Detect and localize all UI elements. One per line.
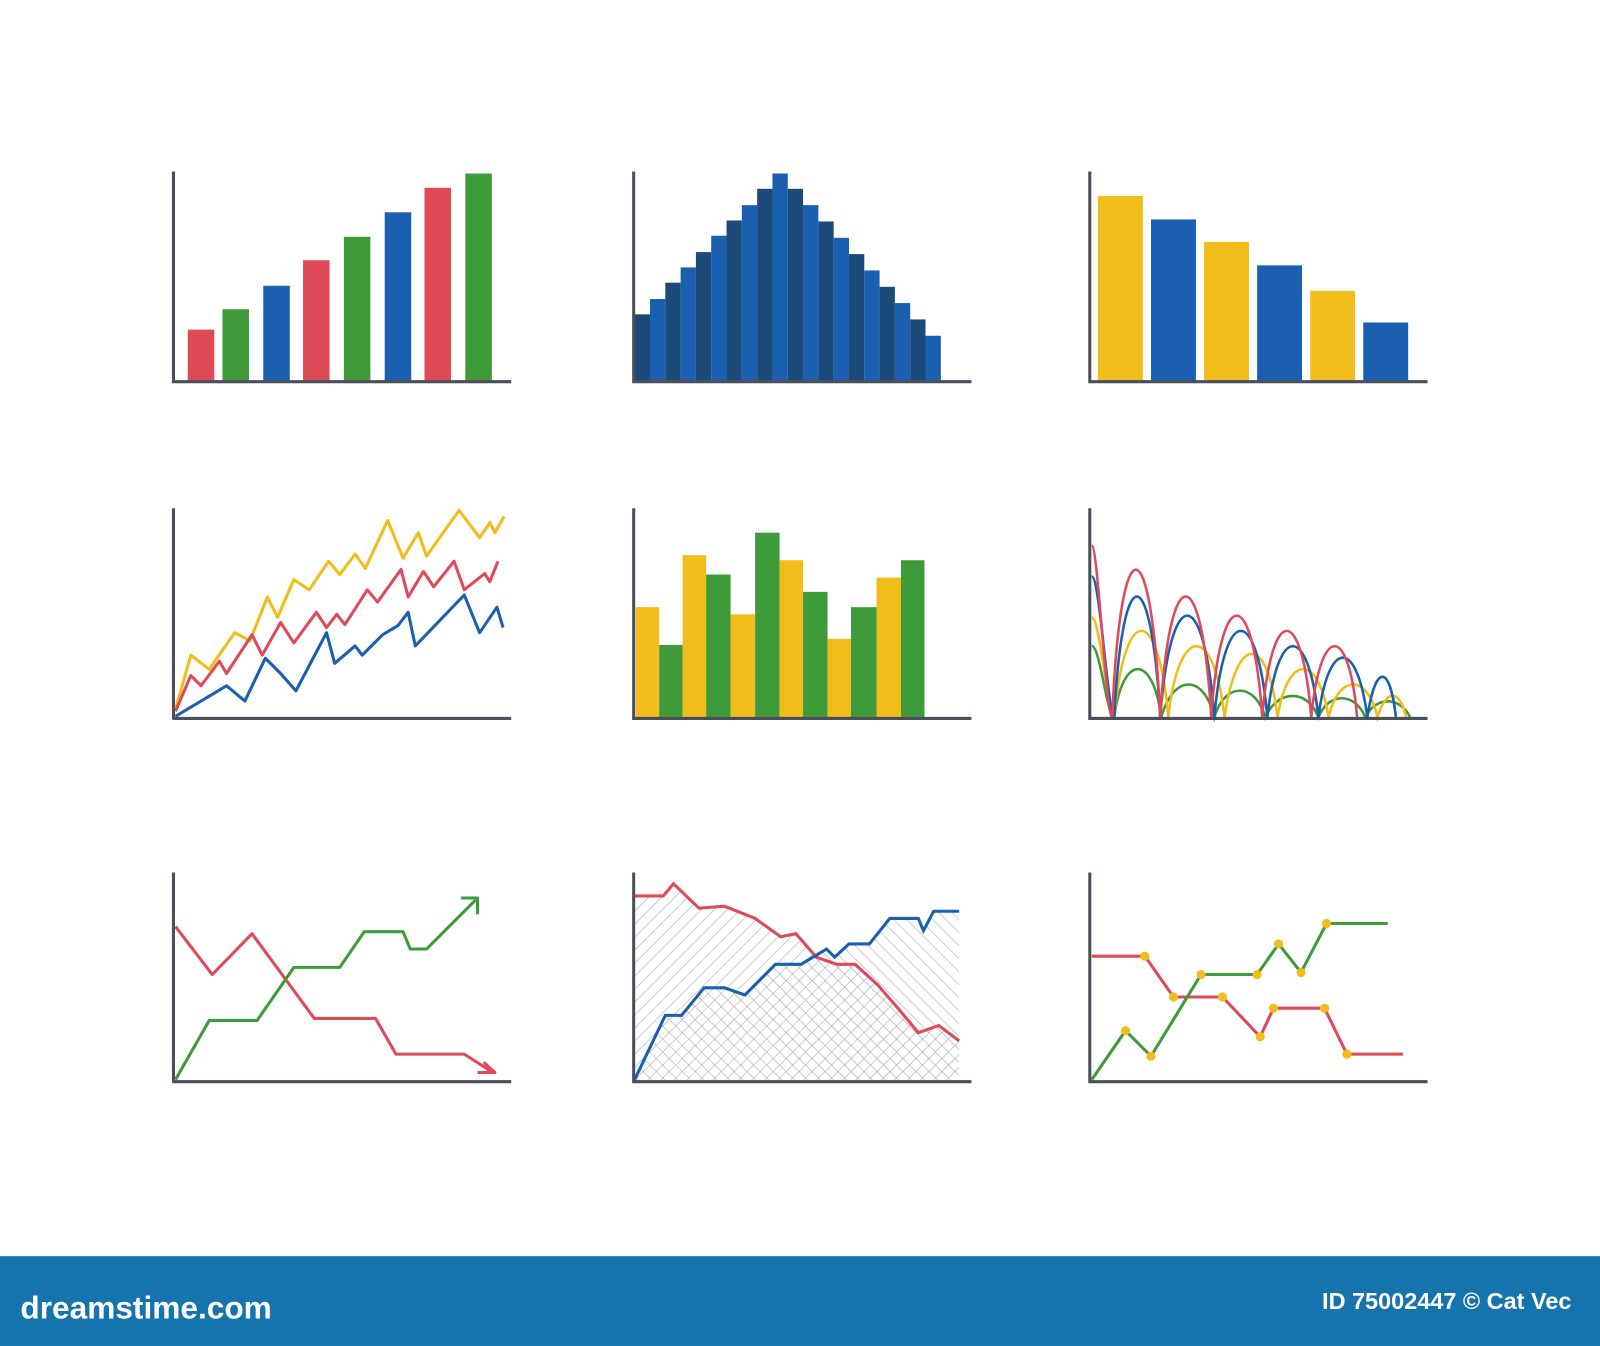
chart: rising bars: [173, 171, 511, 382]
chart: falling bars: [1090, 171, 1428, 382]
footer: image id: ID 75002447 © Cat Vec: [1322, 1288, 1571, 1314]
chart: three rising zigzag lines: [173, 508, 511, 718]
footer: site name: dreamstime.com: [20, 1289, 272, 1325]
footer bar: [0, 1256, 1600, 1346]
chart: yellow green bars: [634, 508, 971, 718]
chart: crossing lines with arrows: [173, 872, 511, 1082]
chart: dotted step lines: [1090, 872, 1428, 1082]
chart: damped oscillation curves: [1090, 508, 1428, 718]
chart: hatched area chart: [634, 872, 971, 1082]
chart: pyramid histogram: [634, 171, 971, 382]
